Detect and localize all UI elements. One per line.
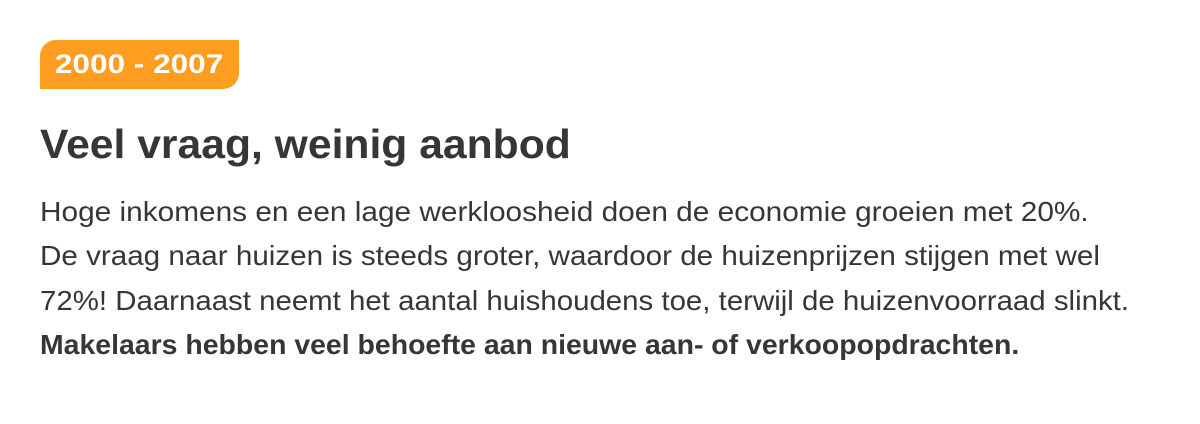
body text: 72%! Daarnaast neemt het aantal huishoudens toe, terwijl de huizenvoorraad slinkt.	[40, 285, 1129, 316]
body text	[40, 196, 1129, 360]
heading: Veel vraag, weinig aanbod	[40, 121, 571, 167]
body text: Hoge inkomens en een lage werkloosheid doen de economie groeien met 20%.	[40, 196, 1089, 227]
body text: Makelaars hebben veel behoefte aan nieuwe aan- of verkoopopdrachten.	[40, 329, 1019, 360]
period badge: 2000 - 2007	[55, 49, 224, 79]
period badge	[40, 40, 239, 89]
body text: De vraag naar huizen is steeds groter, waardoor de huizenprijzen stijgen met wel	[40, 240, 1100, 271]
